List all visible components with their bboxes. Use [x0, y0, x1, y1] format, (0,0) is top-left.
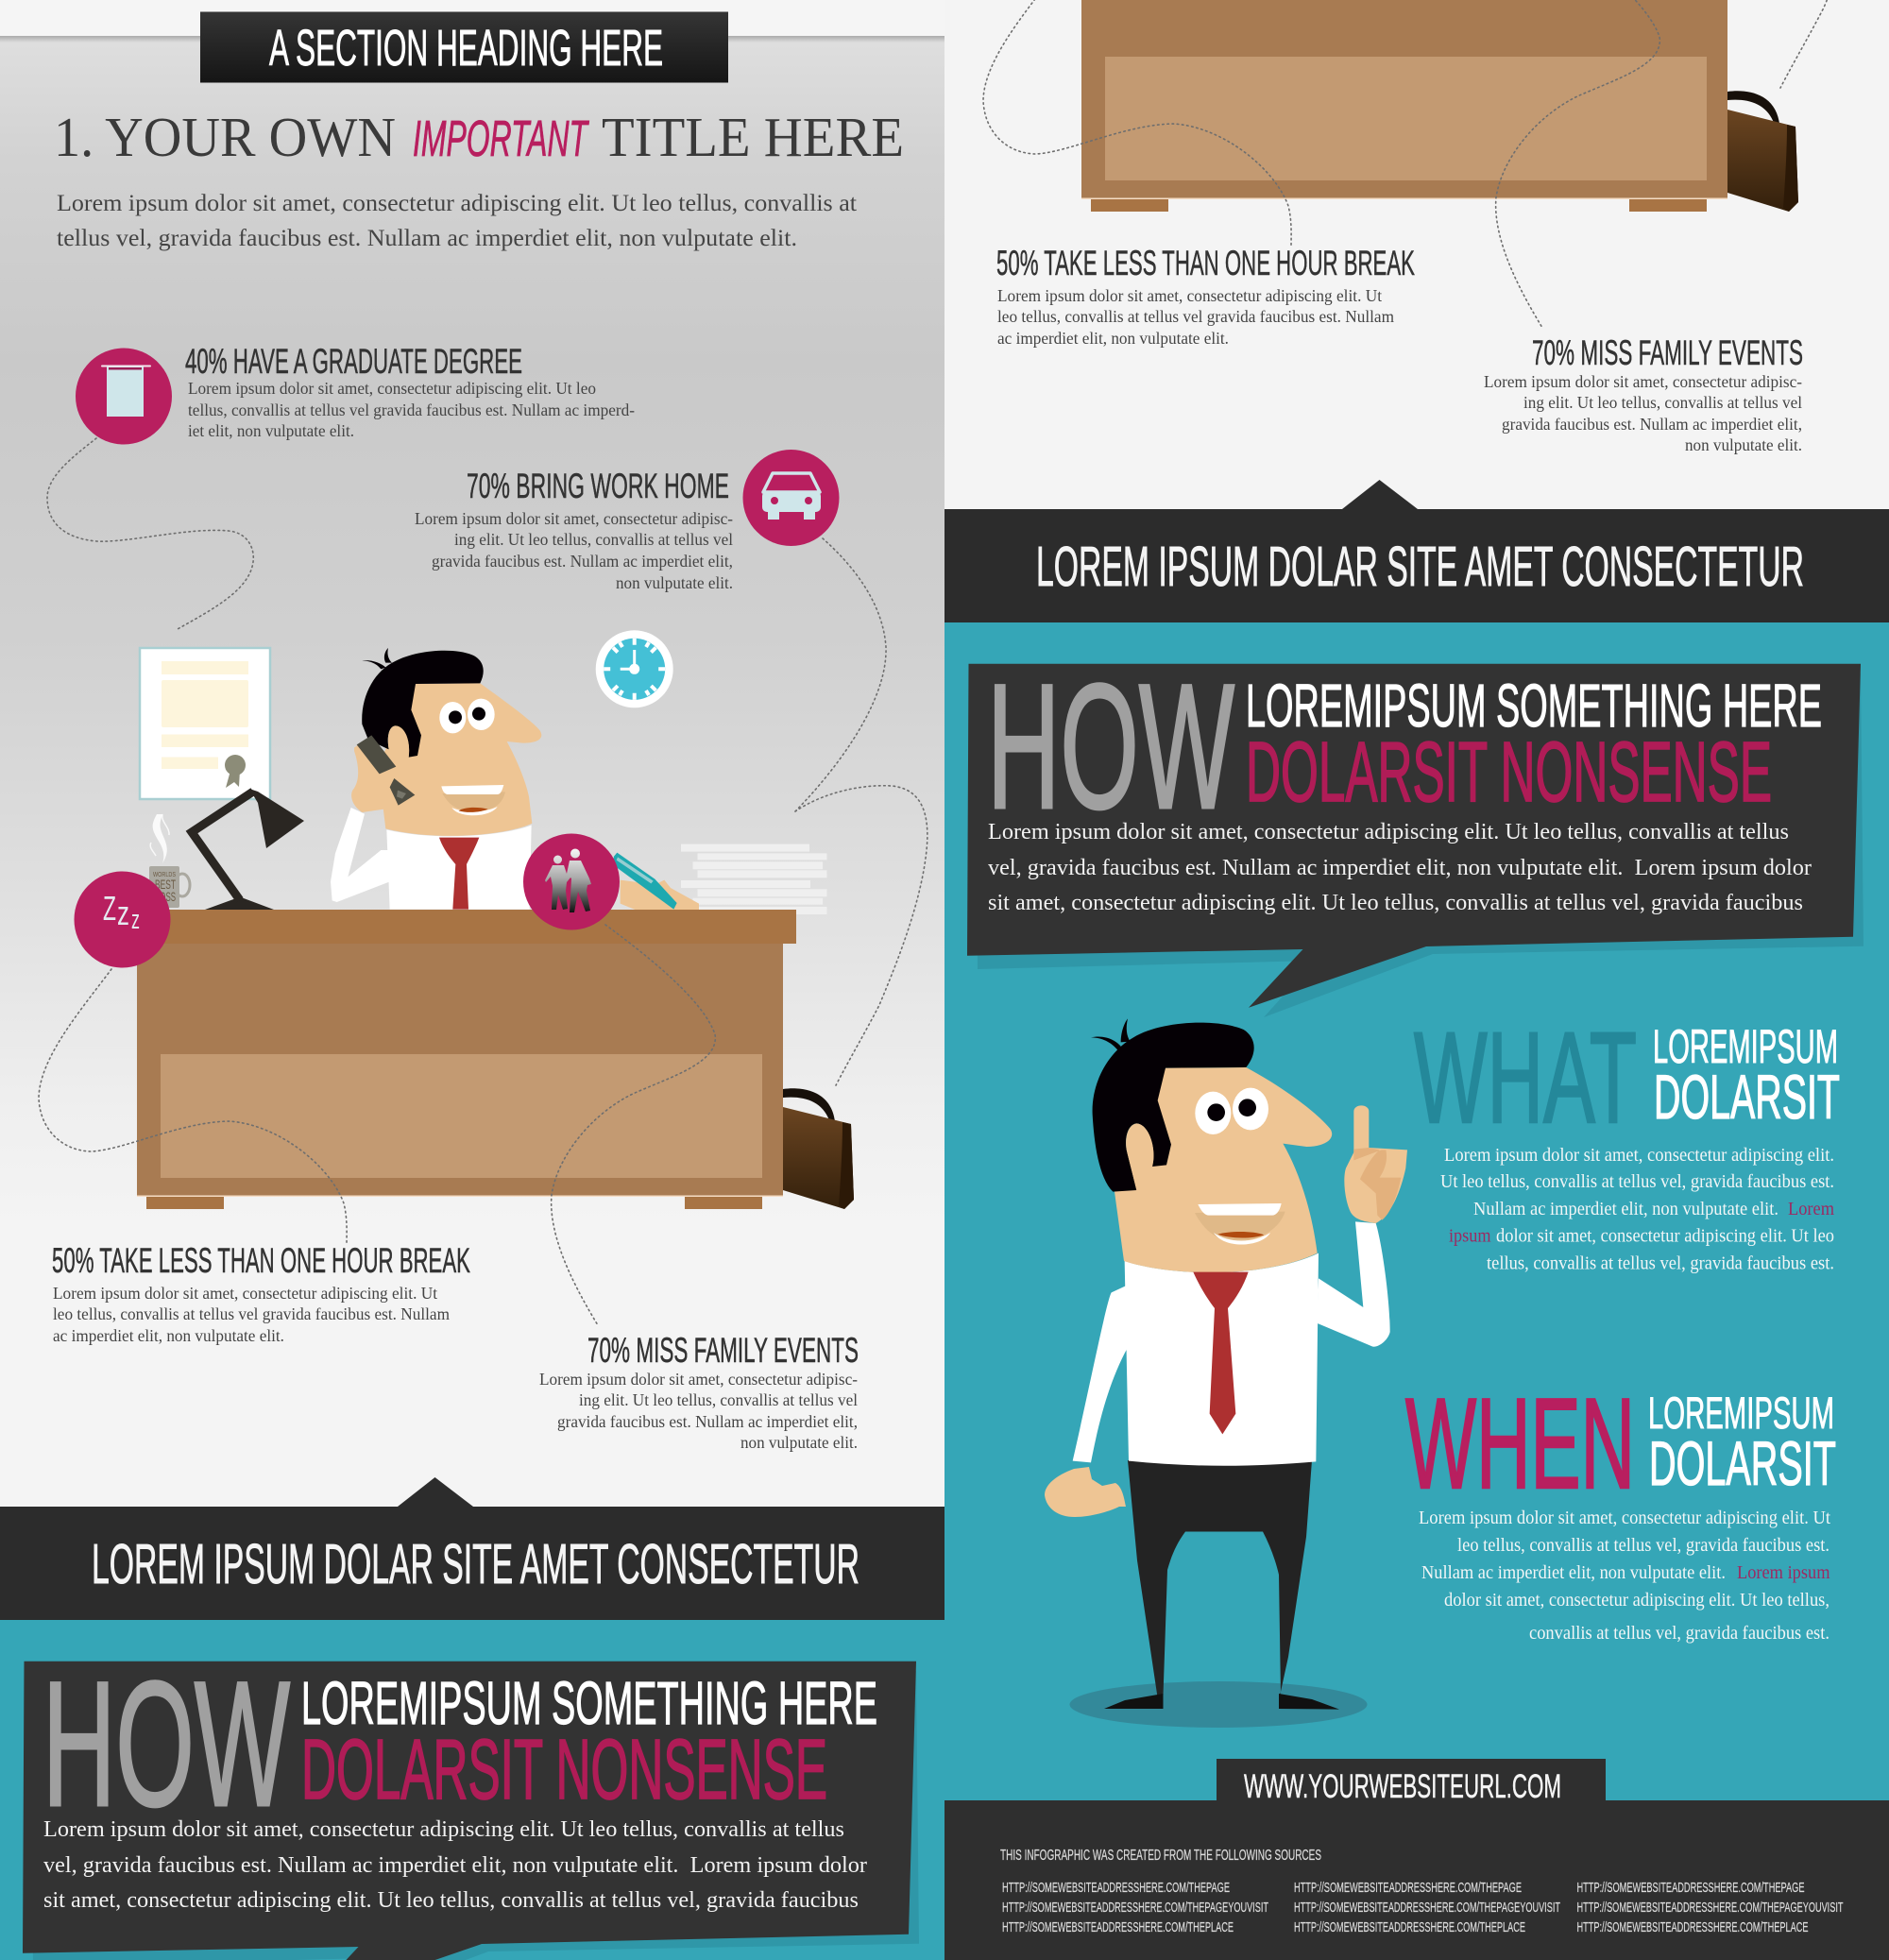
icon: car circle — [742, 450, 839, 546]
source links: HTTP://SOMEWEBSITEADDRESSHERE.COM/THEPAGEYOUVISIT — [1002, 1900, 1268, 1916]
dark banner left — [0, 1477, 944, 1620]
writing hand and pen — [612, 853, 699, 910]
coffee mug: BEST — [155, 877, 176, 892]
coffee mug: BOSS — [155, 889, 176, 904]
when block: leo tellus, convallis at tellus vel, gravida faucibus est. — [1457, 1536, 1829, 1556]
paper stack — [681, 844, 827, 914]
stat: 40% graduate degree: tellus, convallis at tellus vel gravida faucibus est. Nullam ac imperd- — [188, 401, 635, 419]
stat: 40% graduate degree: 40% HAVE A GRADUATE DEGREE — [185, 342, 522, 381]
head — [376, 683, 541, 836]
what block: tellus, convallis at tellus vel, gravida faucibus est. — [1487, 1254, 1834, 1273]
speech box: how right — [967, 647, 1863, 1017]
speech box: how left: LOREMIPSUM SOMETHING HERE — [301, 1669, 877, 1737]
speech box: how left: vel, gravida faucibus est. Nullam ac imperdiet elit, non vulputate elit. Lorem ipsum dolor — [43, 1852, 867, 1878]
icon: couple circle — [523, 833, 620, 929]
section heading — [200, 11, 728, 83]
icon: wall clock — [596, 630, 673, 707]
stat: 70% miss family events: Lorem ipsum dolor sit amet, consectetur adipisc- — [539, 1370, 858, 1389]
stat: 70% bring work home — [415, 467, 733, 592]
stat: 40% graduate degree: iet elit, non vulputate elit. — [188, 421, 354, 440]
intro text: Lorem ipsum dolor sit amet, consectetur adipiscing elit. Ut leo tellus, convallis at — [57, 191, 857, 216]
stat: 40% graduate degree: Lorem ipsum dolor sit amet, consectetur adipiscing elit. Ut leo — [188, 379, 596, 398]
speech box: how right: HOW — [987, 647, 1234, 845]
stat: 70% bring work home: 70% BRING WORK HOME — [467, 467, 729, 505]
pointing hand — [1344, 1105, 1407, 1223]
title — [54, 106, 904, 168]
panel: teal background left — [0, 1620, 944, 1960]
icon: graduate banner circle — [76, 348, 172, 444]
speech box: how left: sit amet, consectetur adipiscing elit. Ut leo tellus, convallis at tellus vel, gravida faucibus — [43, 1887, 859, 1913]
source links: HTTP://SOMEWEBSITEADDRESSHERE.COM/THEPLACE — [1294, 1920, 1525, 1935]
when block: Lorem ipsum — [1737, 1563, 1830, 1583]
when block: Lorem ipsum dolor sit amet, consectetur adipiscing elit. Ut — [1419, 1508, 1831, 1528]
stat: 70% miss family events: non vulputate elit. — [740, 1433, 858, 1452]
stat: 40% graduate degree — [185, 342, 635, 440]
stat: 70% miss family events repeated: gravida faucibus est. Nullam ac imperdiet elit, — [1502, 415, 1802, 434]
trousers — [1128, 1460, 1312, 1700]
when block — [1405, 1372, 1836, 1644]
hand and phone — [351, 735, 415, 812]
speech box: how left: Lorem ipsum dolor sit amet, consectetur adipiscing elit. Ut leo tellus, convallis at tellus — [43, 1816, 844, 1842]
desk continued in right column — [1081, 0, 1798, 212]
mouth — [441, 785, 505, 815]
speech box: how right: Lorem ipsum dolor sit amet, consectetur adipiscing elit. Ut leo tellus, convallis at tellus — [988, 819, 1789, 844]
when block: WHEN — [1405, 1372, 1635, 1515]
coffee mug — [149, 814, 190, 908]
stat: 70% bring work home: ing elit. Ut leo tellus, convallis at tellus vel — [454, 530, 733, 549]
tie — [439, 838, 479, 910]
ear — [1126, 1123, 1153, 1190]
source links: HTTP://SOMEWEBSITEADDRESSHERE.COM/THEPAGE — [1294, 1881, 1522, 1896]
what block: Nullam ac imperdiet elit, non vulputate elit. — [1473, 1200, 1778, 1219]
stat: 70% miss family events: 70% MISS FAMILY EVENTS — [587, 1331, 859, 1370]
what block — [1414, 1006, 1840, 1273]
stat: 50% one hour break repeated: ac imperdiet elit, non vulputate elit. — [997, 329, 1229, 348]
title: IMPORTANT — [413, 111, 589, 167]
hair — [1091, 1018, 1254, 1192]
icon: sleep circle: z — [131, 905, 140, 935]
character: man on phone — [331, 648, 699, 910]
certificate on wall — [140, 648, 270, 799]
what block: dolor sit amet, consectetur adipiscing elit. Ut leo — [1496, 1226, 1834, 1247]
speech box: how left: DOLARSIT NONSENSE — [301, 1723, 827, 1817]
sleeves and shirt — [1073, 1221, 1390, 1466]
desk lamp — [192, 789, 304, 910]
footer — [944, 1759, 1889, 1960]
what block: ipsum — [1449, 1226, 1490, 1247]
stat: 50% one hour break — [52, 1241, 470, 1345]
stat: 70% bring work home: Lorem ipsum dolor sit amet, consectetur adipisc- — [415, 509, 733, 528]
panel: right column background — [944, 0, 1889, 509]
source links: HTTP://SOMEWEBSITEADDRESSHERE.COM/THEPAGE — [1002, 1881, 1230, 1896]
dark banner right — [944, 480, 1889, 622]
stat: 50% one hour break repeated: Lorem ipsum dolor sit amet, consectetur adipiscing elit. Ut — [997, 286, 1382, 305]
head — [1115, 1067, 1332, 1272]
stat: 70% miss family events: gravida faucibus est. Nullam ac imperdiet elit, — [557, 1412, 858, 1431]
shoes — [1104, 1694, 1339, 1710]
source links — [1002, 1881, 1844, 1935]
title: TITLE HERE — [602, 106, 904, 168]
source links: HTTP://SOMEWEBSITEADDRESSHERE.COM/THEPAGEYOUVISIT — [1294, 1900, 1560, 1916]
stat: 50% one hour break repeated: leo tellus, convallis at tellus vel gravida faucibus est. Nullam — [997, 307, 1394, 326]
icon: sleep circle: z — [117, 894, 129, 932]
section heading: A SECTION HEADING HERE — [269, 20, 663, 77]
stat: 70% miss family events repeated: non vulputate elit. — [1685, 435, 1802, 454]
panel: teal background right — [944, 622, 1889, 1960]
stat: 50% one hour break repeated: 50% TAKE LESS THAN ONE HOUR BREAK — [996, 244, 1415, 282]
what block: Ut leo tellus, convallis at tellus vel, gravida faucibus est. — [1440, 1172, 1834, 1192]
briefcase — [783, 1088, 854, 1209]
icon: sleep circle: Z — [103, 889, 116, 928]
stat: 50% one hour break: Lorem ipsum dolor sit amet, consectetur adipiscing elit. Ut — [53, 1284, 437, 1303]
website url: WWW.YOURWEBSITEURL.COM — [1244, 1768, 1561, 1805]
intro text: tellus vel, gravida faucibus est. Nullam ac imperdiet elit, non vulputate elit. — [57, 226, 797, 251]
ear — [388, 725, 409, 768]
stat: 70% miss family events: ing elit. Ut leo tellus, convallis at tellus vel — [579, 1390, 858, 1409]
what block: Lorem ipsum dolor sit amet, consectetur adipiscing elit. — [1444, 1146, 1834, 1166]
ground shadow — [1069, 1681, 1368, 1728]
panel: left column background — [0, 0, 944, 1507]
stat: 50% one hour break: leo tellus, convallis at tellus vel gravida faucibus est. Nullam — [53, 1304, 450, 1323]
character: standing man — [1045, 1018, 1407, 1728]
icon: sleep circle — [74, 871, 170, 967]
stat: 50% one hour break: 50% TAKE LESS THAN ONE HOUR BREAK — [52, 1241, 470, 1280]
what block: Lorem — [1788, 1200, 1834, 1219]
stat: 50% one hour break repeated — [996, 244, 1415, 348]
when block: dolor sit amet, consectetur adipiscing elit. Ut leo tellus, — [1444, 1591, 1829, 1611]
stat: 70% miss family events — [539, 1331, 859, 1452]
dotted connector lines right column — [983, 0, 1872, 328]
speech box: how left: HOW — [43, 1645, 290, 1843]
speech box: how right: vel, gravida faucibus est. Nullam ac imperdiet elit, non vulputate elit. Lorem ipsum dolor — [988, 855, 1812, 880]
tie — [1193, 1272, 1249, 1434]
dotted connector lines — [39, 438, 927, 1325]
intro text — [57, 191, 857, 251]
stat: 70% miss family events repeated: ing elit. Ut leo tellus, convallis at tellus vel — [1523, 393, 1802, 412]
speech box: how right: sit amet, consectetur adipiscing elit. Ut leo tellus, convallis at tellus vel, gravida faucibus — [988, 890, 1803, 915]
arm and shirt — [331, 808, 532, 910]
hair — [362, 648, 484, 758]
stat: 50% one hour break: ac imperdiet elit, non vulputate elit. — [53, 1326, 284, 1345]
title: 1. YOUR OWN — [54, 106, 396, 168]
eyes — [1195, 1088, 1268, 1134]
when block: convallis at tellus vel, gravida faucibus est. — [1529, 1624, 1829, 1644]
stat: 70% bring work home: non vulputate elit. — [616, 573, 733, 592]
eyes — [439, 699, 495, 733]
desk — [124, 910, 796, 1209]
sources heading: THIS INFOGRAPHIC WAS CREATED FROM THE FOLLOWING SOURCES — [1000, 1848, 1321, 1864]
mouth — [1195, 1203, 1285, 1245]
speech box: how left — [23, 1645, 919, 1960]
dark banner left: LOREM IPSUM DOLAR SITE AMET CONSECTETUR — [92, 1533, 859, 1595]
source links: HTTP://SOMEWEBSITEADDRESSHERE.COM/THEPLACE — [1002, 1920, 1234, 1935]
when block: Nullam ac imperdiet elit, non vulputate elit. — [1421, 1563, 1726, 1583]
left hand — [1045, 1467, 1126, 1517]
stat: 70% miss family events repeated — [1484, 333, 1803, 454]
coffee mug: WORLDS — [153, 872, 176, 878]
stat: 70% miss family events repeated: Lorem ipsum dolor sit amet, consectetur adipisc- — [1484, 372, 1802, 391]
stat: 70% bring work home: gravida faucibus est. Nullam ac imperdiet elit, — [432, 552, 733, 571]
what block: WHAT — [1414, 1006, 1637, 1150]
